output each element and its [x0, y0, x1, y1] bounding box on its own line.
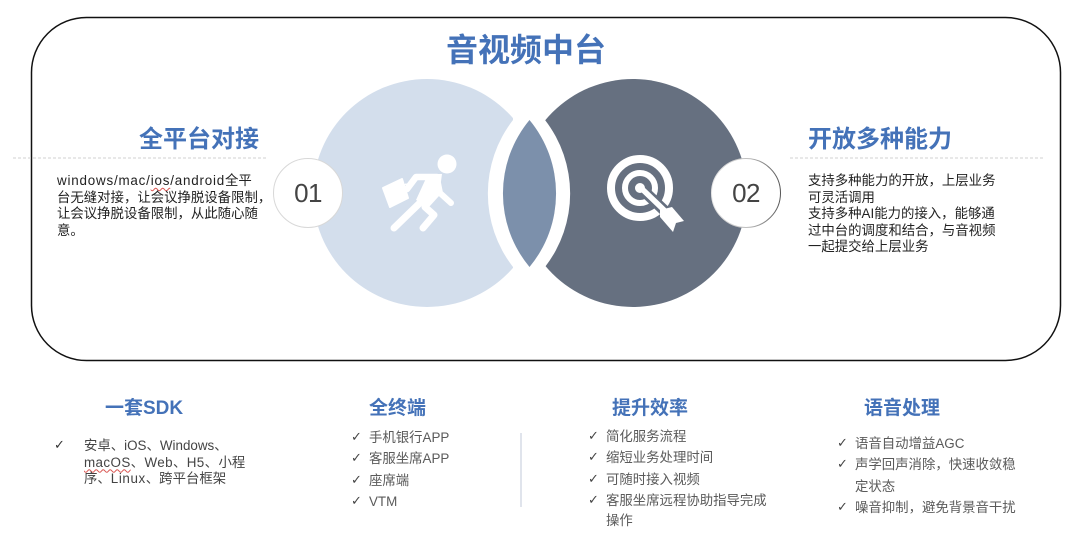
- list item: 语音自动增益AGC: [855, 436, 964, 451]
- overlap lens: [503, 120, 556, 267]
- column: 全终端: ✓: [351, 473, 362, 488]
- text block: platform description: 台无缝对接，让会议挣脱设备限制，: [57, 186, 271, 206]
- list item: 缩短业务处理时间: [606, 450, 713, 465]
- bottom vertical divider: [520, 433, 522, 507]
- text block: platform description: [57, 173, 271, 238]
- heading: 开放多种能力: 开放多种能力: [808, 126, 952, 153]
- text block: capabilities description: 支持多种能力的开放，上层业务: [808, 169, 995, 189]
- SDK platform list: 序、Linux、跨平台框架: [84, 471, 226, 486]
- list item: 客服坐席远程协助指导完成: [606, 493, 767, 508]
- list item: [351, 494, 397, 509]
- text block: platform description: windows/mac/ios/android全平: [57, 173, 252, 188]
- badge number 02: 02: [732, 178, 760, 208]
- SDK platform list: [84, 438, 245, 486]
- badge number 01: 01: [294, 178, 322, 208]
- left circle: [318, 79, 513, 307]
- column: 提升效率: [588, 398, 767, 528]
- column: 全终端: ✓: [351, 430, 362, 445]
- text block: capabilities description: 过中台的调度和结合，与音视频: [808, 218, 995, 238]
- list item: 噪音抑制，避免背景音干扰: [855, 496, 1016, 516]
- column: 一套SDK: [54, 398, 245, 486]
- column: 提升效率: ✓: [588, 493, 599, 508]
- list item: 手机银行APP: [369, 430, 449, 445]
- text block: capabilities description: 支持多种AI能力的接入，能够通: [808, 202, 995, 222]
- icon: running man with briefcase: [383, 154, 456, 228]
- list item: 座席端: [369, 473, 409, 488]
- left dashed divider: [13, 157, 268, 159]
- column: 提升效率: ✓: [588, 472, 599, 487]
- SDK platform list: macOS、Web、H5、小程: [84, 455, 245, 470]
- list item continuation: 定状态: [855, 479, 895, 494]
- list item: 简化服务流程: [606, 429, 686, 444]
- heading: 语音处理: 语音处理: [864, 398, 940, 419]
- text block: capabilities description: 一起提交给上层业务: [808, 239, 929, 254]
- column: 语音处理: [837, 398, 1016, 516]
- list item: VTM: [369, 494, 397, 509]
- icon: target with arrow: [611, 159, 684, 232]
- list item: [351, 473, 409, 488]
- text block: capabilities description: 可灵活调用: [808, 190, 875, 204]
- list item continuation: 操作: [606, 513, 633, 528]
- text block: platform description: 让会议挣脱设备限制，从此随心随: [57, 202, 258, 222]
- text block: platform description: 意。: [57, 222, 84, 238]
- list item: 声学回声消除，快速收敛稳: [855, 453, 1016, 473]
- right dashed divider: [790, 157, 1045, 159]
- text block: capabilities description: [808, 169, 995, 254]
- column: 全终端: ✓: [351, 451, 362, 466]
- check mark: ✓: [54, 438, 65, 453]
- title: 音视频中台: [446, 32, 606, 68]
- SDK platform list: 安卓、iOS、Windows、: [84, 438, 228, 453]
- column: 语音处理: ✓: [837, 457, 848, 472]
- badge circle 01: [274, 158, 342, 228]
- column: 语音处理: ✓: [837, 500, 848, 515]
- column: 全终端: ✓: [351, 494, 362, 509]
- badge circle 02: [712, 158, 780, 228]
- column: 提升效率: ✓: [588, 429, 599, 444]
- column: 全终端: [351, 398, 449, 509]
- heading: 提升效率: 提升效率: [612, 398, 688, 419]
- column: 语音处理: ✓: [837, 436, 848, 451]
- heading: 全平台对接: 全平台对接: [139, 126, 259, 153]
- list item: 可随时接入视频: [606, 472, 700, 487]
- heading: 一套SDK: 一套SDK: [105, 398, 183, 419]
- heading: 全终端: 全终端: [369, 398, 426, 419]
- column: 提升效率: ✓: [588, 450, 599, 465]
- list item: 客服坐席APP: [369, 451, 449, 466]
- right circle: [545, 79, 742, 307]
- rounded frame: [32, 18, 1060, 360]
